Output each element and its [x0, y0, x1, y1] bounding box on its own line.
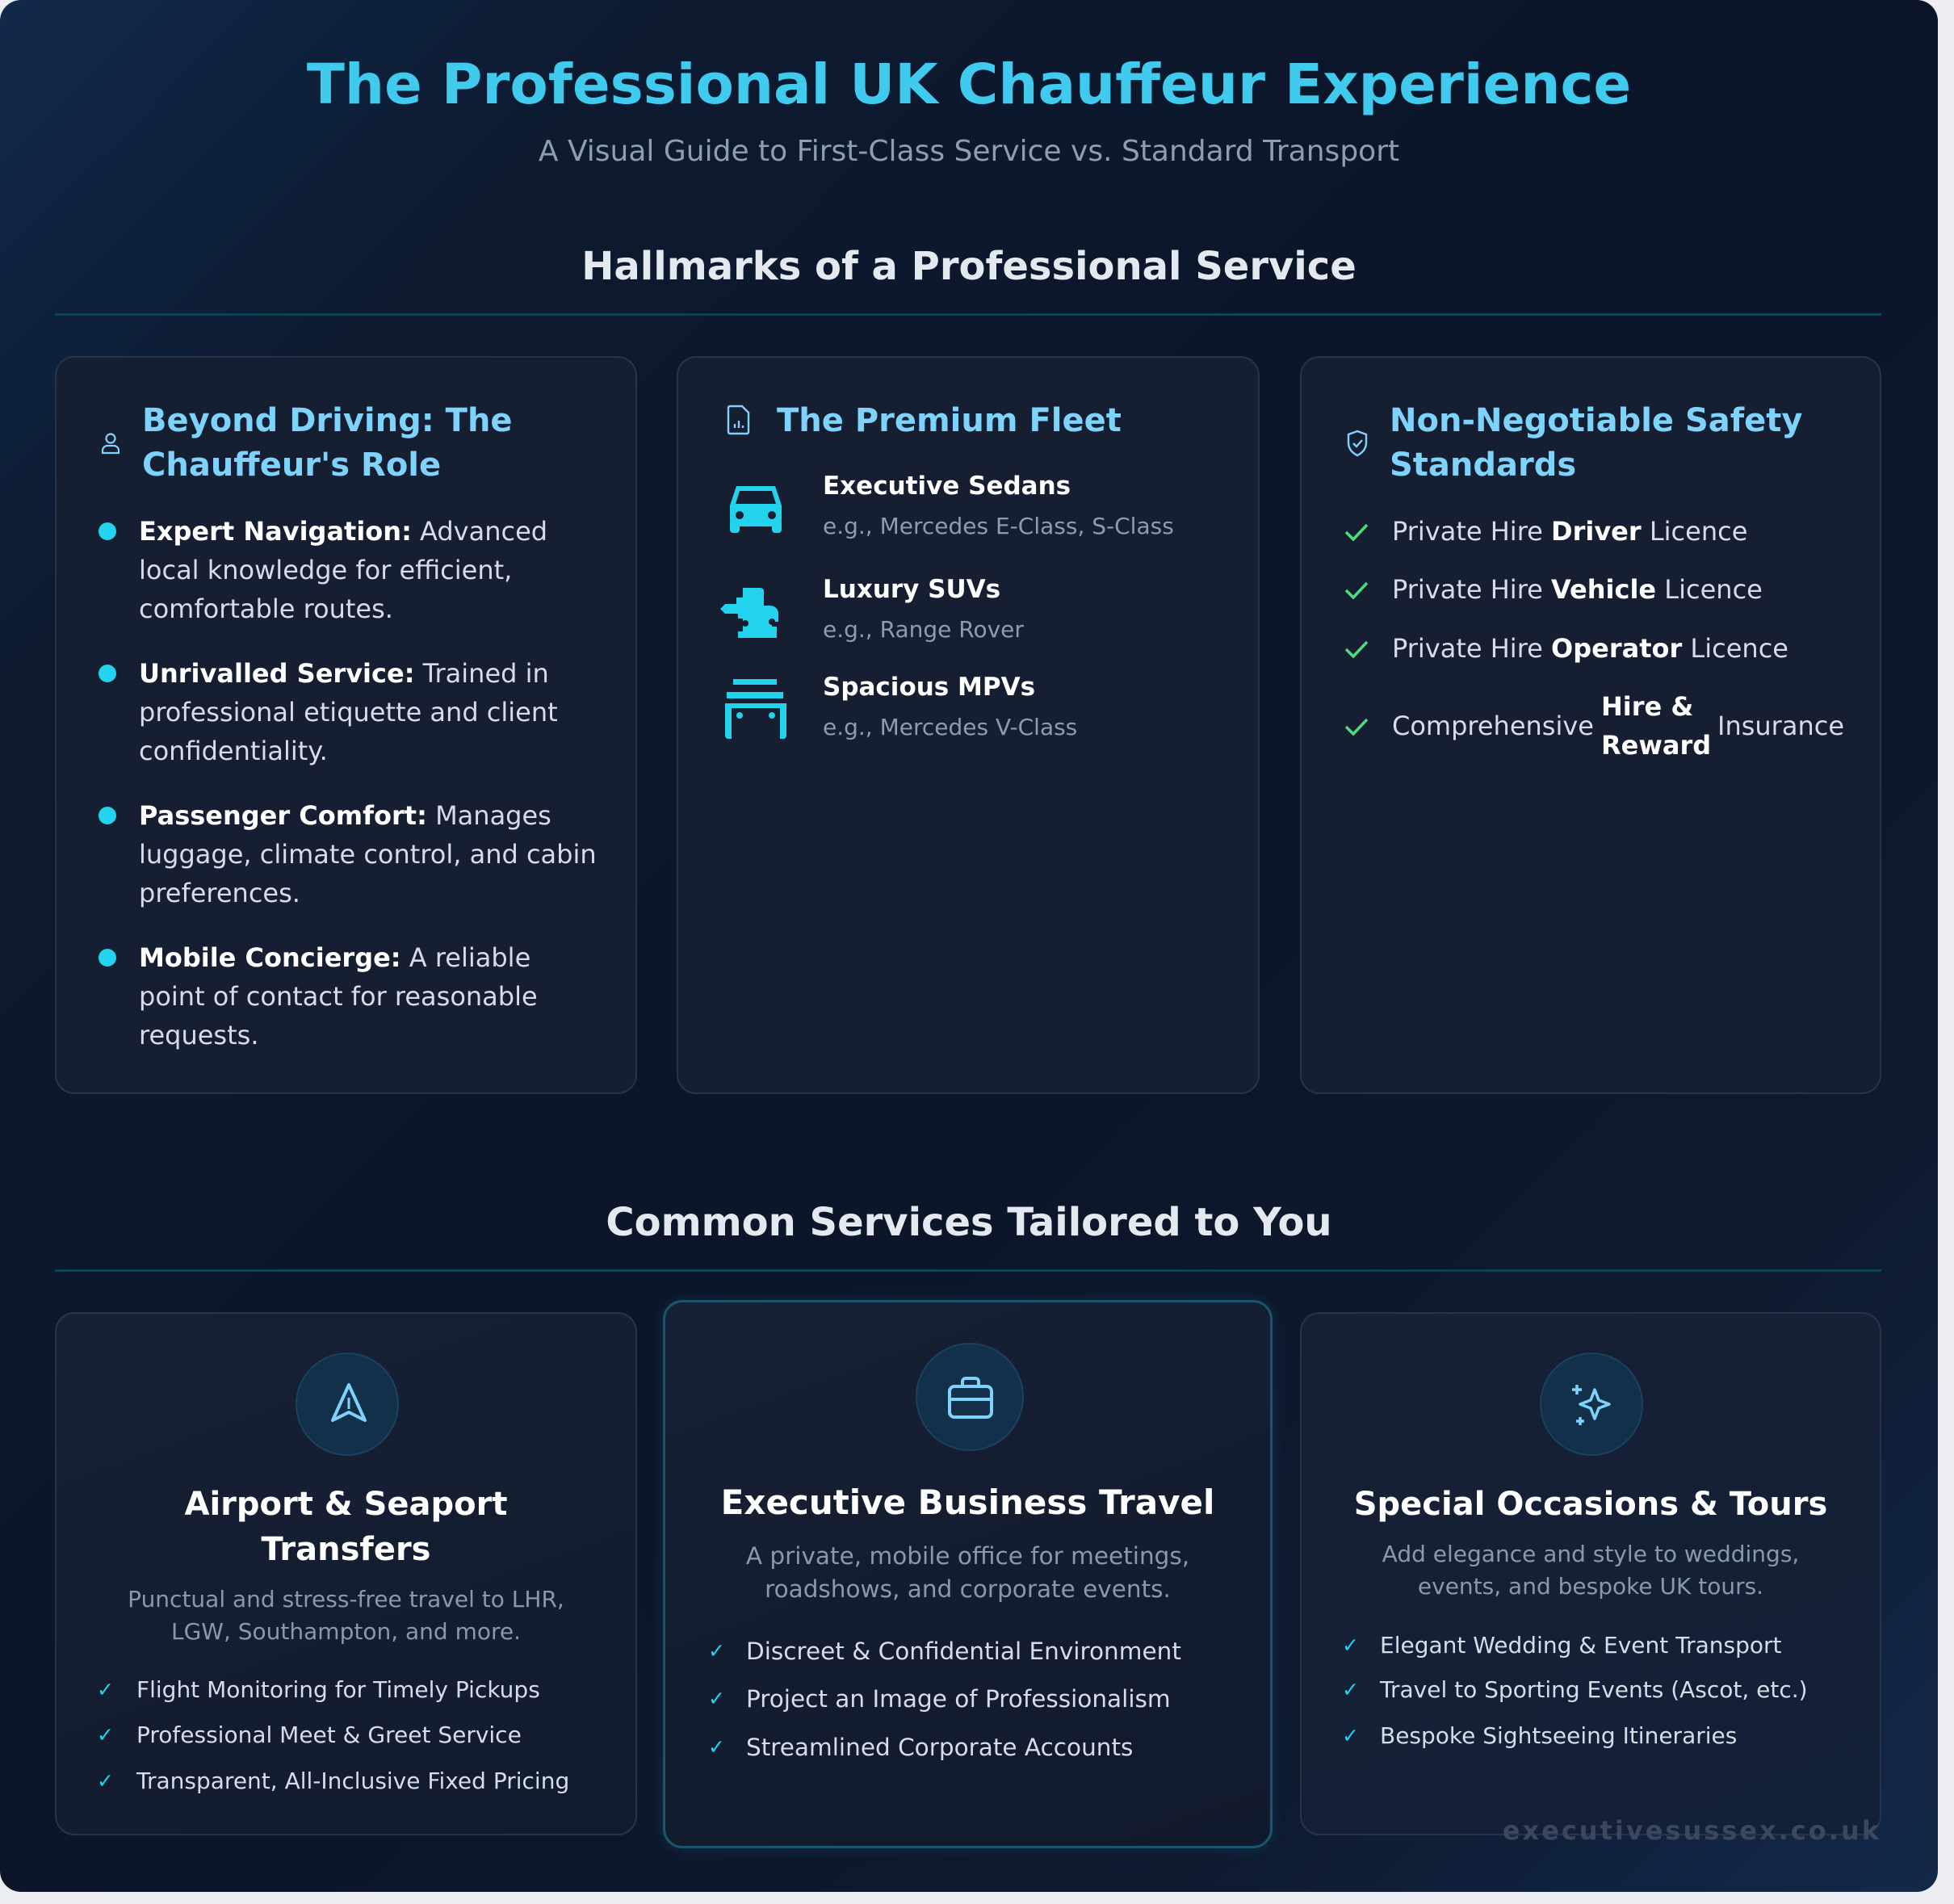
description: A private, mobile office for meetings, [746, 1542, 1189, 1570]
bullet list: comfortable routes. [139, 593, 393, 624]
bullet list: local knowledge for efficient, [139, 555, 512, 585]
description: events, and bespoke UK tours. [1418, 1573, 1763, 1600]
fleet item: sedans [730, 472, 1174, 539]
bullet list: requests. [139, 1020, 258, 1051]
safety list: Hire & [1601, 691, 1693, 722]
feature list: ✓ [1342, 1678, 1359, 1701]
description [1382, 1541, 1799, 1600]
feature list: ✓ [708, 1639, 725, 1663]
bullet list: point of contact for reasonable [139, 981, 538, 1012]
fleet item: MPVs: Spacious MPVs [823, 673, 1035, 702]
description: LGW, Southampton, and more. [171, 1618, 521, 1645]
panel: airport transfers [55, 1312, 637, 1835]
feature list: ✓ [97, 1678, 114, 1701]
title: Executive Business Travel [721, 1483, 1214, 1522]
feature list: Streamlined Corporate Accounts [746, 1734, 1133, 1761]
feature list: Discreet & Confidential Environment [746, 1638, 1181, 1665]
bullet list: Expert Navigation: Advanced [139, 516, 547, 547]
heading: The Premium Fleet [777, 402, 1122, 439]
feature list: Bespoke Sightseeing Itineraries [1380, 1722, 1737, 1749]
feature list: ✓ [97, 1769, 114, 1793]
safety list: Reward [1601, 730, 1711, 761]
feature list: Professional Meet & Greet Service [136, 1722, 522, 1748]
heading: Chauffeur's Role [142, 447, 441, 484]
watermark: executivesussex.co.uk [1503, 1815, 1881, 1846]
bullet list: Unrivalled Service: Trained in [139, 658, 549, 689]
description: Punctual and stress-free travel to LHR, [128, 1586, 564, 1613]
feature list: ✓ [97, 1723, 114, 1747]
feature list: ✓ [708, 1687, 725, 1710]
safety list: Private Hire Driver Licence [1392, 516, 1747, 547]
subtitle: A Visual Guide to First-Class Service vs. Standard Transport [539, 135, 1399, 168]
safety list: Comprehensive [1392, 711, 1594, 741]
heading: Standards [1390, 447, 1576, 484]
safety list: Private Hire Vehicle Licence [1392, 574, 1763, 605]
panel: special occasions [1300, 1312, 1881, 1835]
description: Add elegance and style to weddings, [1382, 1541, 1799, 1567]
feature list [708, 1638, 1181, 1761]
heading: Non-Negotiable Safety [1390, 402, 1803, 439]
section heading: hallmarks: Hallmarks of a Professional Service [581, 244, 1356, 289]
fleet item: MPVs [725, 673, 1077, 740]
description [746, 1542, 1189, 1603]
icon: navigation arrow [296, 1353, 399, 1456]
title: Special Occasions & Tours [1354, 1486, 1827, 1523]
feature list: ✓ [708, 1735, 725, 1759]
panel: premium fleet [677, 356, 1260, 1094]
title: Transfers [262, 1531, 430, 1568]
icon: sparkles [1540, 1353, 1643, 1456]
description: roadshows, and corporate events. [765, 1575, 1171, 1603]
description [128, 1586, 564, 1645]
heading [142, 402, 513, 484]
section heading: services: Common Services Tailored to You [606, 1200, 1332, 1245]
feature list: Transparent, All-Inclusive Fixed Pricing [136, 1768, 569, 1794]
title: The Professional UK Chauffeur Experience [307, 52, 1631, 117]
fleet item: sedans: Executive Sedans [823, 472, 1071, 501]
feature list: ✓ [1342, 1633, 1359, 1657]
fleet item: SUVs: e.g., Range Rover [823, 616, 1024, 643]
safety list: Private Hire Operator Licence [1392, 633, 1788, 664]
bullet list: luggage, climate control, and cabin [139, 839, 597, 870]
bullet list: professional etiquette and client [139, 697, 558, 728]
bullet list [99, 516, 597, 1051]
title [184, 1486, 507, 1568]
feature list [1342, 1632, 1808, 1749]
panel: safety standards [1300, 356, 1881, 1094]
bullet list: Mobile Concierge: A reliable [139, 942, 530, 973]
heading: Beyond Driving: The [142, 402, 513, 439]
feature list [97, 1676, 569, 1794]
icon: person [102, 433, 120, 454]
fleet item: sedans: e.g., Mercedes E-Class, S-Class [823, 513, 1174, 539]
title: Airport & Seaport [184, 1486, 507, 1523]
fleet item: MPVs: e.g., Mercedes V-Class [823, 714, 1077, 740]
panel: chauffeur's role [55, 356, 637, 1094]
heading [1390, 402, 1803, 484]
panel: business travel [663, 1300, 1273, 1848]
feature list: Flight Monitoring for Timely Pickups [136, 1676, 540, 1703]
feature list: Travel to Sporting Events (Ascot, etc.) [1380, 1676, 1808, 1703]
safety list: Insurance [1717, 711, 1844, 741]
safety list [1345, 516, 1844, 761]
feature list: ✓ [1342, 1724, 1359, 1747]
fleet item: SUVs [720, 575, 1024, 643]
icon: shield [1347, 430, 1368, 457]
bullet list: Passenger Comfort: Manages [139, 800, 551, 831]
bullet list: preferences. [139, 878, 300, 908]
fleet item: SUVs: Luxury SUVs [823, 575, 1000, 604]
feature list: Project an Image of Professionalism [746, 1685, 1171, 1713]
bullet list: confidentiality. [139, 736, 328, 766]
icon: briefcase [916, 1343, 1024, 1451]
icon: document chart [727, 405, 749, 434]
feature list: Elegant Wedding & Event Transport [1380, 1632, 1782, 1659]
